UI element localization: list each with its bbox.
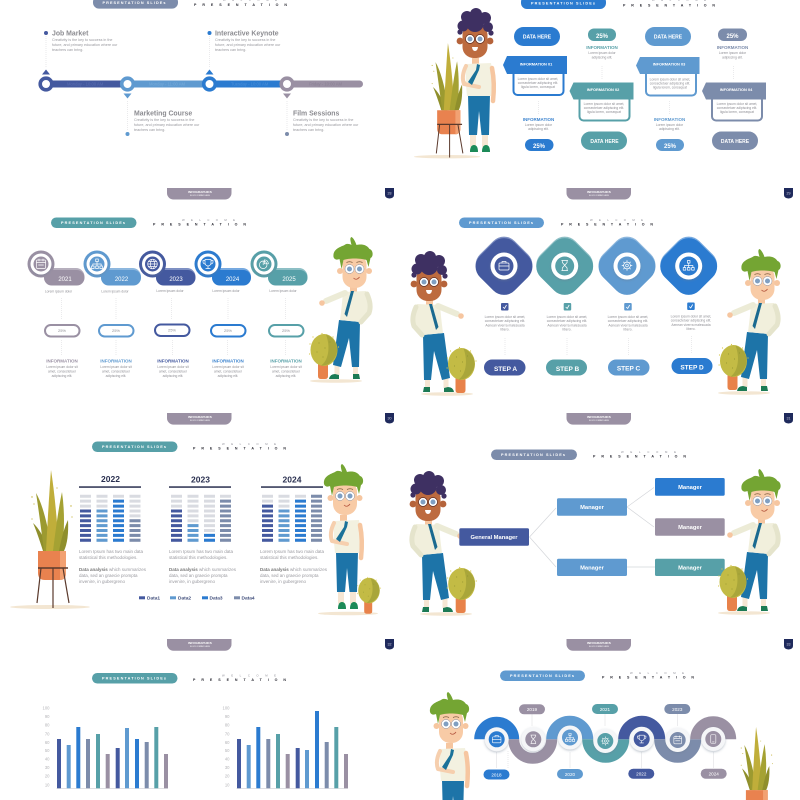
header title: PRESENTATION: [193, 446, 286, 450]
block 2024: statistical this methodologies.: [260, 555, 319, 560]
slide 31: diamond steps: [411, 218, 793, 425]
left bar chart: 30: [45, 765, 50, 770]
slide 32: yearly bar blocks: [10, 442, 394, 651]
right bar chart: 20: [225, 774, 230, 779]
box: Manager top: [557, 498, 627, 516]
header pill: PRESENTATION SLIDEs: [510, 674, 574, 678]
block 2022: [79, 474, 147, 584]
plant: [724, 727, 786, 800]
column 1: ligula lorem, consequat: [521, 85, 555, 89]
step D: Lorem ipsum dolor sit amet,: [671, 314, 711, 318]
column 3: consectetuer adipiscing elit.: [650, 82, 690, 86]
header pill: PRESENTATION SLIDEs: [501, 453, 565, 457]
slide 33: org chart: [410, 450, 793, 651]
step A: Lorem ipsum dolor sit amet,: [485, 315, 525, 319]
footer tab: INFOGRAPHICS: [587, 641, 611, 645]
block 2023: invenire, in gubergreno: [169, 579, 216, 584]
header pill: PRESENTATION SLIDEs: [102, 445, 166, 449]
header title: PRESENTATION: [194, 3, 287, 7]
character: [430, 692, 469, 800]
header pill: PRESENTATION SLIDEs: [102, 1, 166, 5]
year 2022: 25%: [112, 328, 120, 333]
column 3: [636, 27, 700, 151]
timeline bar: Friday - 10:00 AM: [309, 82, 343, 86]
node 2024: 2024: [709, 772, 719, 776]
step D: consectetuer adipiscing elit.: [671, 318, 711, 322]
milestone: Interactive Keynote: teachers can bring.: [215, 48, 246, 52]
timeline bar: Monday - 11:00 AM: [149, 82, 186, 86]
column 4: adipiscing elit.: [722, 56, 743, 60]
node 2019: 2019: [527, 707, 538, 712]
slide 35: wave timeline: [430, 670, 786, 800]
footer tab: BLOCK COMPANY HERE: [190, 645, 211, 648]
year 2024: amet, consectetuer: [214, 370, 243, 374]
year 2023: adipiscing elit.: [163, 374, 183, 378]
step B: libero.: [563, 328, 572, 332]
footer tab: INFOGRAPHICS: [587, 415, 611, 419]
legend: Data3: [210, 596, 223, 602]
node 2022: [628, 727, 654, 779]
column 2: 25%: [596, 34, 609, 40]
block 2022: data, sed an graecie prompta: [79, 573, 138, 578]
left bar chart: 40: [45, 757, 50, 762]
character with cactus: [318, 464, 381, 615]
year 2021: amet, consectetuer: [48, 370, 77, 374]
year 2025: 2025: [282, 277, 296, 283]
footer tab: BLOCK COMPANY HERE: [589, 645, 610, 648]
header title: [561, 218, 653, 226]
character left with cactus: [411, 251, 477, 396]
column 2: consectetuer adipiscing elit.: [584, 106, 624, 110]
slide 30: yearly steps: [28, 218, 394, 425]
year 2025: [250, 250, 308, 378]
footer tab: INFOGRAPHICS: [188, 190, 212, 194]
page number badge: [784, 639, 793, 650]
step C: Aenean viverra malesuada: [608, 324, 648, 328]
header pill: [92, 442, 178, 452]
year 2025: INFORMATION: [270, 359, 302, 364]
character with plant: [414, 8, 494, 158]
node 2021: [592, 704, 618, 753]
page number badge: 32: [388, 642, 392, 646]
year 2024: INFORMATION: [212, 359, 244, 364]
year 2023: [139, 250, 196, 378]
block 2024: [260, 474, 328, 584]
column 2: [570, 28, 634, 150]
year 2021: adipiscing elit.: [52, 374, 72, 378]
milestone: Marketing Course: teachers can bring.: [134, 128, 165, 132]
footer tab: [167, 188, 232, 200]
step C: libero.: [624, 328, 633, 332]
header title: PRESENTATION: [593, 454, 686, 458]
column 2: Lorem ipsum dolor: [588, 51, 617, 55]
node 2020: [557, 726, 583, 779]
footer tab: [167, 413, 232, 425]
milestone: Marketing Course: Marketing Course: [134, 110, 192, 118]
footer tab: BLOCK COMPANY HERE: [589, 419, 610, 422]
column 3: Lorem ipsum dolor: [656, 123, 684, 127]
block 2022: statistical this methodologies.: [79, 555, 138, 560]
left bar chart: 60: [45, 740, 50, 745]
milestone: Interactive Keynote: Interactive Keynote: [215, 30, 279, 38]
year 2023: 2023: [169, 277, 183, 283]
year 2022: adipiscing elit.: [106, 374, 126, 378]
step D: STEP D: [680, 364, 704, 372]
step A: consectetuer adipiscing elit.: [485, 319, 525, 323]
right bar chart: 60: [225, 740, 230, 745]
legend: Data4: [242, 596, 255, 602]
year 2025: adipiscing elit.: [276, 374, 296, 378]
milestone: Film Sessions: teachers can bring.: [293, 128, 324, 132]
year 2025: 25%: [282, 328, 290, 333]
header pill: [521, 0, 606, 9]
wave band: [480, 721, 731, 758]
character right with cactus: [718, 469, 781, 615]
block 2024: 2024: [283, 474, 302, 484]
step B: Aenean viverra malesuada: [547, 324, 587, 328]
year 2024: Lorem ipsum dolor: [212, 289, 241, 293]
box: Manager teal: Manager: [678, 566, 703, 572]
box: Manager bottom: Manager: [580, 566, 605, 572]
header title: [193, 442, 286, 450]
year 2022: [84, 250, 141, 378]
connector lines: [530, 488, 655, 567]
footer tab: BLOCK COMPANY HERE: [589, 194, 610, 197]
box: Manager bottom: [557, 559, 627, 576]
character left with cactus: [410, 471, 477, 616]
page number badge: 33: [786, 642, 790, 646]
step B: STEP B: [556, 366, 579, 373]
header title: PRESENTATION: [193, 678, 286, 682]
right bar chart: [222, 705, 348, 789]
year 2021: 25%: [58, 328, 66, 333]
column 4: DATA HERE: [721, 139, 750, 145]
header title: WELCOME: [621, 450, 676, 454]
node 2018: [484, 727, 510, 780]
page number badge: 30: [388, 416, 392, 420]
column 2: DATA HERE: [590, 139, 619, 145]
milestone: Interactive Keynote: future, and primary education where our: [215, 43, 281, 47]
year 2022: 2022: [115, 277, 129, 283]
header title: [193, 674, 286, 682]
milestone: Film Sessions: Creativity is the key to success in the: [293, 118, 353, 122]
header pill: PRESENTATION SLIDEs: [61, 221, 125, 225]
year 2021: Lorem ipsum dolor sit: [46, 365, 78, 369]
right bar chart: 10: [225, 782, 230, 787]
column 4: 25%: [726, 34, 739, 40]
slide 29: information cards: [414, 0, 793, 200]
block 2024: data, sed an graecie prompta: [260, 573, 319, 578]
footer tab: [566, 188, 631, 200]
block 2022: invenire, in gubergreno: [79, 579, 126, 584]
page number badge: [784, 188, 793, 198]
year 2021: [28, 250, 84, 378]
column 1: INFORMATION 01: [520, 62, 553, 66]
block 2024: Lorem Ipsum has two main data: [260, 549, 325, 554]
year 2021: 2021: [58, 277, 72, 283]
column 1: consectetuer adipiscing elit.: [518, 81, 558, 85]
right bar chart: 80: [225, 723, 230, 728]
header title: PRESENTATION: [623, 3, 715, 7]
page number badge: [784, 413, 793, 424]
header pill: [92, 673, 178, 684]
step B: Lorem ipsum dolor sit amet,: [547, 315, 587, 319]
legend: Data1: [147, 596, 160, 602]
milestone: Job Market: Creativity is the key to success in the: [52, 38, 112, 42]
header title: [623, 0, 715, 7]
node 2024: [701, 727, 727, 779]
column 4: Lorem ipsum dolor sit amet,: [717, 102, 757, 106]
year 2023: amet, consectetuer: [159, 370, 188, 374]
box: Manager blue: Manager: [678, 485, 703, 491]
column 2: INFORMATION: [586, 45, 618, 50]
legend: [139, 596, 255, 602]
column 4: Lorem ipsum dolor: [719, 51, 747, 55]
block 2023: 2023: [191, 474, 210, 484]
milestone: Film Sessions: Film Sessions: [293, 110, 340, 118]
column 1: DATA HERE: [523, 34, 552, 40]
step D: [654, 230, 723, 374]
column 3: ligula lorem, consequat: [653, 86, 687, 90]
box: Manager blue: [655, 478, 725, 496]
year 2024: Lorem ipsum dolor sit: [212, 365, 244, 369]
step D: Aenean viverra malesuada: [671, 323, 711, 327]
column 2: INFORMATION 02: [587, 87, 620, 92]
header title: WELCOME: [222, 442, 276, 446]
year 2023: INFORMATION: [157, 359, 189, 364]
timeline bar: Monday - 10:00 AM: [67, 82, 104, 86]
column 4: [702, 28, 766, 150]
left bar chart: 90: [45, 714, 50, 719]
page number badge: 31: [786, 416, 790, 420]
block 2022: Data analysis which summarizes: [79, 567, 147, 572]
block 2023: data, sed an graecie prompta: [169, 573, 228, 578]
header title: PRESENTATION: [602, 676, 694, 680]
block 2022: Lorem Ipsum has two main data: [79, 549, 144, 554]
header pill: PRESENTATION SLIDEs: [469, 221, 533, 225]
node 2019: [519, 704, 545, 751]
block 2023: Data analysis which summarizes: [169, 567, 237, 572]
column 1: 25%: [533, 144, 546, 150]
step A: STEP A: [494, 366, 517, 373]
footer tab: INFOGRAPHICS: [587, 190, 611, 194]
node 2022: 2022: [636, 772, 647, 776]
year 2023: 25%: [168, 328, 176, 332]
block 2023: [169, 474, 237, 584]
page number badge: 29: [786, 192, 790, 196]
block 2023: statistical this methodologies.: [169, 555, 228, 560]
milestone: Marketing Course: Creativity is the key to success in the: [134, 118, 194, 122]
milestone: Job Market: teachers can bring.: [52, 48, 83, 52]
year 2022: amet, consectetuer: [102, 370, 131, 374]
header title: [602, 671, 694, 680]
step B: [530, 230, 599, 376]
box: General Manager: General Manager: [470, 535, 518, 541]
column 1: adipiscing elit.: [528, 127, 549, 131]
page number badge: 28: [388, 192, 392, 196]
left bar chart: 20: [45, 774, 50, 779]
step D: libero.: [687, 327, 696, 331]
character right with cactus: [718, 249, 781, 395]
header pill: PRESENTATION SLIDEs: [531, 2, 595, 6]
header pill: [93, 0, 178, 9]
milestone: Marketing Course: [124, 94, 200, 136]
block 2023: Lorem Ipsum has two main data: [169, 549, 234, 554]
column 3: INFORMATION 03: [653, 62, 686, 66]
page number badge: [385, 188, 394, 198]
step C: [592, 230, 662, 376]
character with cactus: [309, 237, 373, 383]
footer tab: [167, 639, 232, 651]
milestone: Film Sessions: [283, 94, 359, 136]
footer tab: [566, 639, 631, 651]
header title: [153, 218, 246, 226]
step C: Lorem ipsum dolor sit amet,: [608, 315, 648, 319]
header pill: PRESENTATION SLIDEs: [102, 676, 166, 680]
left bar chart: [42, 705, 168, 789]
box: General Manager: [459, 528, 529, 546]
year 2024: 25%: [224, 328, 232, 333]
left bar chart: 50: [45, 748, 50, 753]
column 1: [503, 27, 567, 151]
footer tab: INFOGRAPHICS: [188, 415, 212, 419]
header pill: [51, 218, 136, 228]
column 2: Lorem ipsum dolor sit amet,: [584, 102, 624, 106]
right bar chart: 30: [225, 765, 230, 770]
header title: WELCOME: [222, 674, 276, 678]
year 2024: 2024: [226, 277, 240, 283]
column 3: adipiscing elit.: [659, 127, 680, 131]
milestone: Job Market: [42, 30, 118, 74]
node 2020: 2020: [565, 772, 576, 777]
right bar chart: 40: [225, 757, 230, 762]
step A: [469, 230, 539, 376]
header title: [593, 450, 686, 458]
milestone: Job Market: future, and primary education where our: [52, 43, 118, 47]
left bar chart: 100: [42, 705, 50, 710]
header pill: [459, 218, 544, 228]
right bar chart: 50: [225, 748, 230, 753]
column 4: consectetuer adipiscing elit.: [717, 106, 757, 110]
footer tab: BLOCK COMPANY HERE: [190, 194, 211, 197]
year 2024: adipiscing elit.: [218, 374, 238, 378]
year 2021: Lorem ipsum dolor: [45, 290, 73, 294]
footer tab: BLOCK COMPANY HERE: [190, 419, 211, 422]
plant: [10, 470, 90, 609]
connectors: [497, 714, 714, 768]
column 3: 25%: [664, 144, 677, 150]
year 2024: [194, 250, 251, 378]
year 2025: Lorem ipsum dolor: [269, 289, 298, 293]
step C: STEP C: [617, 366, 640, 372]
box: Manager mauve: [655, 518, 725, 536]
column 3: DATA HERE: [654, 34, 683, 40]
slide 28: horizontal timeline: [40, 0, 394, 200]
step A: libero.: [501, 328, 510, 332]
step C: consectetuer adipiscing elit.: [608, 319, 648, 323]
node 2021: 2021: [600, 707, 611, 712]
timeline bar: Tuesday - 10:00 AM: [231, 82, 269, 86]
column 2: adipiscing elit.: [592, 56, 612, 60]
header title: PRESENTATION: [561, 222, 653, 226]
year 2023: Lorem ipsum dolor sit: [157, 365, 189, 369]
header title: [194, 0, 287, 7]
milestone: Interactive Keynote: Creativity is the key to success in the: [215, 38, 275, 42]
column 1: INFORMATION: [523, 117, 554, 122]
year 2022: Lorem ipsum dolor sit: [100, 365, 132, 369]
block 2022: 2022: [101, 474, 120, 484]
header title: PRESENTATION: [153, 222, 246, 226]
legend: Data2: [178, 596, 191, 602]
year 2025: amet, consectetuer: [272, 370, 301, 374]
step A: Aenean viverra malesuada: [485, 324, 525, 328]
year 2021: INFORMATION: [46, 359, 78, 364]
left bar chart: 10: [45, 782, 50, 787]
right bar chart: 90: [225, 714, 230, 719]
header pill: [500, 670, 585, 681]
left bar chart: 70: [45, 731, 50, 736]
column 2: ligula lorem, consequat: [587, 110, 621, 114]
year 2023: Lorem ipsum dolor: [156, 289, 185, 293]
right bar chart: 70: [225, 731, 230, 736]
box: Manager top: Manager: [580, 505, 605, 511]
slide 34: column charts: [42, 673, 348, 789]
header title: WELCOME: [590, 218, 643, 222]
year 2022: INFORMATION: [100, 359, 132, 364]
column 3: INFORMATION: [654, 117, 685, 122]
milestone: Film Sessions: future, and primary education where our: [293, 123, 359, 127]
column 4: INFORMATION 04: [720, 87, 753, 92]
box: Manager teal: [655, 559, 725, 576]
node 2023: 2023: [672, 707, 683, 712]
page number badge: [385, 413, 394, 424]
milestone: Job Market: Job Market: [52, 30, 89, 38]
milestone: Marketing Course: future, and primary education where our: [134, 123, 200, 127]
step B: consectetuer adipiscing elit.: [547, 319, 587, 323]
node 2023: [664, 704, 690, 752]
header title: WELCOME: [182, 218, 235, 222]
column 3: Lorem ipsum dolor sit amet,: [650, 78, 690, 82]
year 2022: Lorem ipsum dolor: [101, 290, 130, 294]
column 1: Lorem ipsum dolor sit amet,: [518, 77, 558, 81]
right bar chart: 100: [222, 705, 230, 710]
year 2025: Lorem ipsum dolor sit: [270, 365, 302, 369]
page number badge: [385, 639, 394, 650]
milestone: Interactive Keynote: [206, 30, 281, 74]
column 4: ligula lorem, consequat: [720, 110, 754, 114]
node 2018: 2018: [491, 772, 502, 777]
left bar chart: 80: [45, 723, 50, 728]
column 4: INFORMATION: [717, 45, 748, 50]
box: Manager mauve: Manager: [678, 525, 703, 531]
column 1: Lorem ipsum dolor: [525, 123, 553, 127]
block 2024: Data analysis which summarizes: [260, 567, 328, 572]
footer tab: INFOGRAPHICS: [188, 641, 212, 645]
header title: WELCOME: [630, 671, 684, 675]
footer tab: [566, 413, 631, 425]
block 2024: invenire, in gubergreno: [260, 579, 307, 584]
header pill: [491, 450, 577, 460]
timeline bar: [40, 78, 363, 90]
